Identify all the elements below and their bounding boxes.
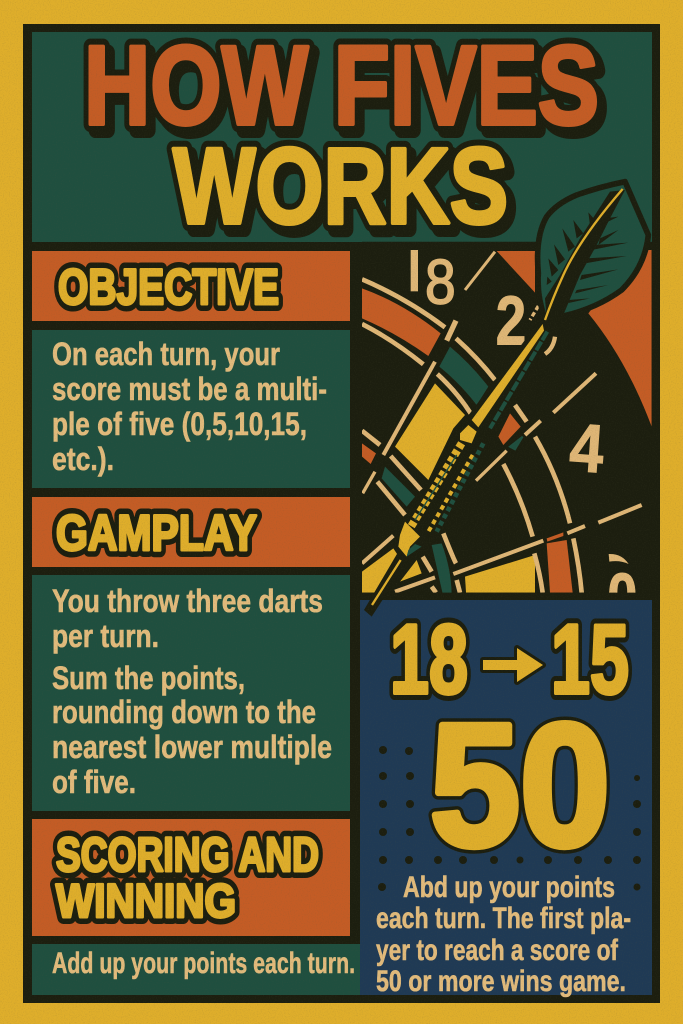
conversion: 18 to 15: 18 bbox=[390, 604, 468, 714]
panel: gameplay heading: GAMPLAY bbox=[56, 505, 257, 561]
board numbers bbox=[410, 250, 636, 593]
panel: gameplay text: rounding down to the bbox=[52, 694, 316, 730]
conversion: 18 to 15: 15 bbox=[551, 604, 629, 714]
board numbers: 8 bbox=[425, 247, 456, 317]
big number 50: 50 bbox=[430, 687, 610, 882]
board numbers: 4 bbox=[567, 410, 606, 488]
panel: gameplay text: nearest lower multiple bbox=[52, 729, 332, 765]
panel: gameplay text bbox=[32, 575, 350, 811]
board radial lines bbox=[362, 252, 642, 592]
result text: Abd up your points bbox=[403, 871, 615, 904]
panel: objective text: score must be a multi- bbox=[52, 371, 327, 407]
board numbers: 0 bbox=[607, 559, 637, 632]
panel: objective text: On each turn, your bbox=[52, 336, 280, 372]
result text bbox=[376, 871, 631, 998]
board wire arcs bbox=[362, 279, 582, 593]
panel: objective text bbox=[32, 330, 350, 488]
panel: gameplay heading: GAMPLAY bbox=[56, 505, 257, 561]
panel: dartboard illustration bbox=[362, 242, 652, 632]
panel: gameplay text: Sum the points, bbox=[52, 660, 245, 696]
big number 50: 50 bbox=[430, 687, 610, 882]
panel: title bbox=[32, 23, 652, 252]
dart barrel bbox=[397, 425, 490, 560]
panel: scoring text bbox=[32, 944, 360, 995]
panel: scoring heading: SCORING AND bbox=[56, 829, 319, 882]
dart shaft bbox=[460, 320, 550, 437]
dot pattern bbox=[378, 746, 641, 891]
dart point bbox=[364, 552, 408, 617]
panel: scoring heading: WINNING bbox=[56, 874, 236, 927]
panel: gameplay text: of five. bbox=[52, 764, 136, 800]
panel: gameplay heading bbox=[32, 497, 350, 567]
illustration: dart bbox=[364, 182, 648, 617]
board wedges bbox=[362, 288, 573, 597]
panel: scoring heading: SCORING AND bbox=[56, 829, 319, 882]
panel: gameplay text: per turn. bbox=[52, 618, 159, 654]
conversion: 18 to 15 bbox=[390, 604, 629, 714]
conversion: 18 to 15: 18 bbox=[390, 604, 468, 714]
conversion: 18 to 15: 15 bbox=[551, 604, 629, 714]
panel: objective heading: OBJECTIVE bbox=[58, 259, 279, 315]
board numbers: 2 bbox=[496, 282, 526, 360]
arrow bbox=[483, 648, 543, 682]
panel: scoring heading: WINNING bbox=[56, 874, 236, 927]
orange background shapes bbox=[497, 250, 652, 427]
panel: blue result bbox=[360, 600, 652, 998]
panel: gameplay text: You throw three darts bbox=[52, 583, 323, 619]
heading: works: WORKS bbox=[173, 125, 508, 246]
panel: objective heading: OBJECTIVE bbox=[58, 259, 279, 315]
panel: objective text: ple of five (0,5,10,15, bbox=[52, 406, 307, 442]
heading: works: WORKS bbox=[178, 131, 513, 252]
panel: scoring text: Add up your points each turn. bbox=[52, 947, 355, 980]
dart flight leaf bbox=[538, 182, 648, 320]
panel: scoring heading bbox=[32, 819, 350, 936]
heading: works: WORKS bbox=[173, 125, 508, 246]
panel: objective text: etc.). bbox=[52, 441, 114, 477]
